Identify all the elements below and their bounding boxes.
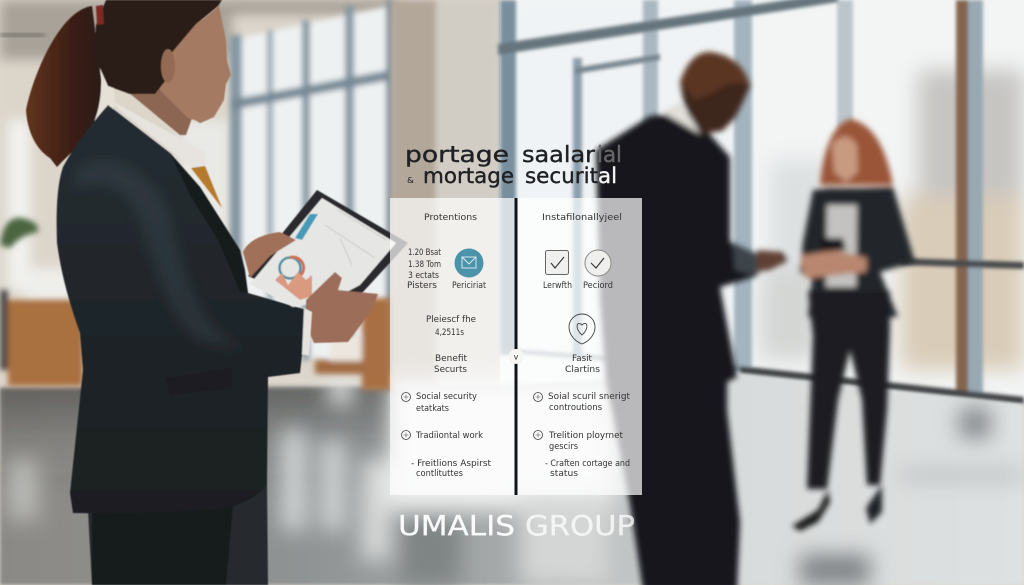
shirt cuff — [302, 308, 312, 356]
left list: contlituttes — [416, 469, 464, 479]
left list: etatkats — [416, 404, 450, 414]
left list: Tradiìontal work — [415, 431, 483, 441]
right mid text — [565, 354, 601, 375]
left column heading: Protentions — [424, 213, 477, 223]
left mid text: 4,2511s — [435, 328, 464, 338]
shirt collar and tie — [110, 100, 205, 172]
brand wordmark: UMALIS — [398, 509, 515, 542]
title — [405, 143, 622, 188]
floor — [0, 373, 1024, 585]
jacket sheen — [75, 160, 245, 350]
right list: status — [550, 469, 579, 479]
icon: versus badge — [508, 349, 524, 364]
figure: woman in background — [792, 119, 915, 531]
tablet — [248, 190, 408, 307]
title: saalar — [522, 143, 596, 168]
left mid text: Securts — [434, 365, 468, 375]
icon: checked circle — [585, 250, 611, 276]
right list: Trelition ployrnet — [548, 431, 624, 441]
right mid text: Clartins — [565, 365, 601, 375]
figure: woman in foreground — [26, 0, 408, 585]
left stats list — [407, 248, 442, 291]
window: left bank — [230, 0, 394, 375]
title: mortage — [423, 164, 514, 188]
icon: checked square — [546, 250, 568, 274]
right list: - Craften cortage and — [545, 459, 630, 469]
icon: versus badge: v — [514, 352, 519, 362]
title: & — [407, 176, 414, 185]
panel: comparison table — [390, 198, 642, 495]
left list: Social security — [416, 392, 477, 402]
right list: Soial scuril snerigt — [548, 392, 631, 402]
figure: man in background — [596, 52, 822, 585]
brand wordmark: GROUP — [525, 509, 635, 542]
title: portage — [405, 143, 509, 168]
left list — [402, 392, 492, 479]
face — [160, 6, 231, 122]
left mid text — [426, 315, 476, 375]
trousers — [88, 480, 268, 585]
left mid text: Pleiescf fhe — [426, 315, 476, 325]
furniture and plant — [0, 218, 391, 390]
left stats list: 1.38 Tom — [408, 260, 441, 270]
left list: - Freitlions Aspirst — [411, 459, 492, 469]
right mid text: Fasit — [572, 354, 593, 364]
right list: gescirs — [549, 442, 579, 452]
icon: envelope badge — [454, 248, 484, 278]
label: periciriat: Periciriat — [452, 281, 487, 291]
left stats list: 3 ectats — [408, 271, 440, 281]
left stats list: Pisters — [407, 281, 438, 291]
jacket — [57, 105, 307, 513]
labels under check icons: Peciord — [583, 281, 613, 291]
labels under check icons — [543, 281, 613, 291]
hands — [243, 232, 296, 278]
ear — [161, 49, 175, 83]
left stats list: 1.20 Bsat — [408, 248, 442, 258]
labels under check icons: Lerwfth — [543, 281, 572, 291]
window: right bank — [498, 0, 1024, 405]
right list — [534, 392, 631, 479]
right column heading: Instafilonallyjeel — [542, 213, 622, 223]
title: al — [598, 164, 617, 188]
brand wordmark — [398, 509, 635, 542]
left mid text: Benefit — [435, 354, 468, 364]
title: securit — [525, 164, 598, 188]
right list: controutions — [549, 403, 603, 413]
ponytail — [26, 6, 101, 167]
icon: heart pin — [569, 314, 595, 344]
title: ial — [597, 143, 622, 168]
hair — [94, 0, 222, 94]
